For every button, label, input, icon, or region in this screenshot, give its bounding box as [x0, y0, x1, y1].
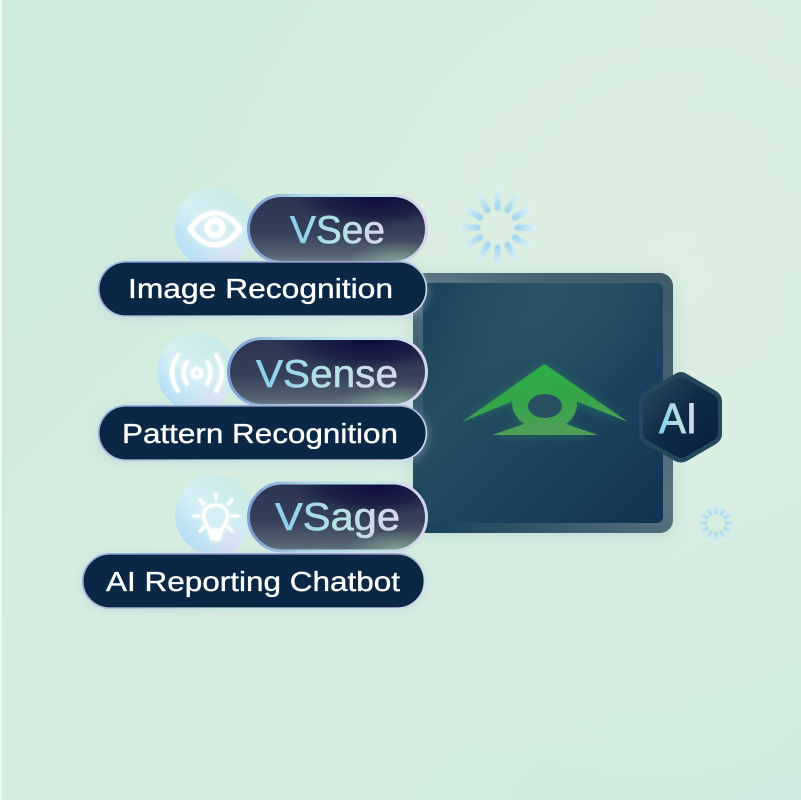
- row: VSage: [82, 475, 426, 610]
- row: VSee: [98, 188, 427, 319]
- label: Pattern Recognition: [98, 406, 427, 463]
- icon: AI hexagon badge: [639, 372, 722, 462]
- row: VSense: [98, 333, 427, 463]
- pill: VSee: VSee: [290, 209, 385, 252]
- pill: VSage: [248, 483, 426, 551]
- label: AI: AI: [659, 395, 697, 443]
- label: AI Reporting Chatbot: AI Reporting Chatbot: [106, 566, 400, 597]
- label: Pattern Recognition: Pattern Recognition: [122, 418, 398, 449]
- icon: eye: [174, 188, 254, 268]
- icon: green logo: [462, 364, 628, 435]
- panel: logo card: [413, 273, 673, 536]
- pill: VSage: VSage: [275, 496, 400, 539]
- pill: VSee: [248, 196, 426, 262]
- icon: large sunburst: [458, 188, 536, 266]
- icon: signal: [157, 333, 235, 411]
- pill: VSense: VSense: [256, 353, 398, 396]
- label: Image Recognition: [98, 262, 427, 319]
- label: AI Reporting Chatbot: [82, 554, 425, 610]
- label: Image Recognition: Image Recognition: [128, 273, 393, 304]
- pill: VSense: [228, 338, 426, 406]
- icon: light bulb: [175, 475, 255, 555]
- icon: small sunburst: [696, 503, 736, 543]
